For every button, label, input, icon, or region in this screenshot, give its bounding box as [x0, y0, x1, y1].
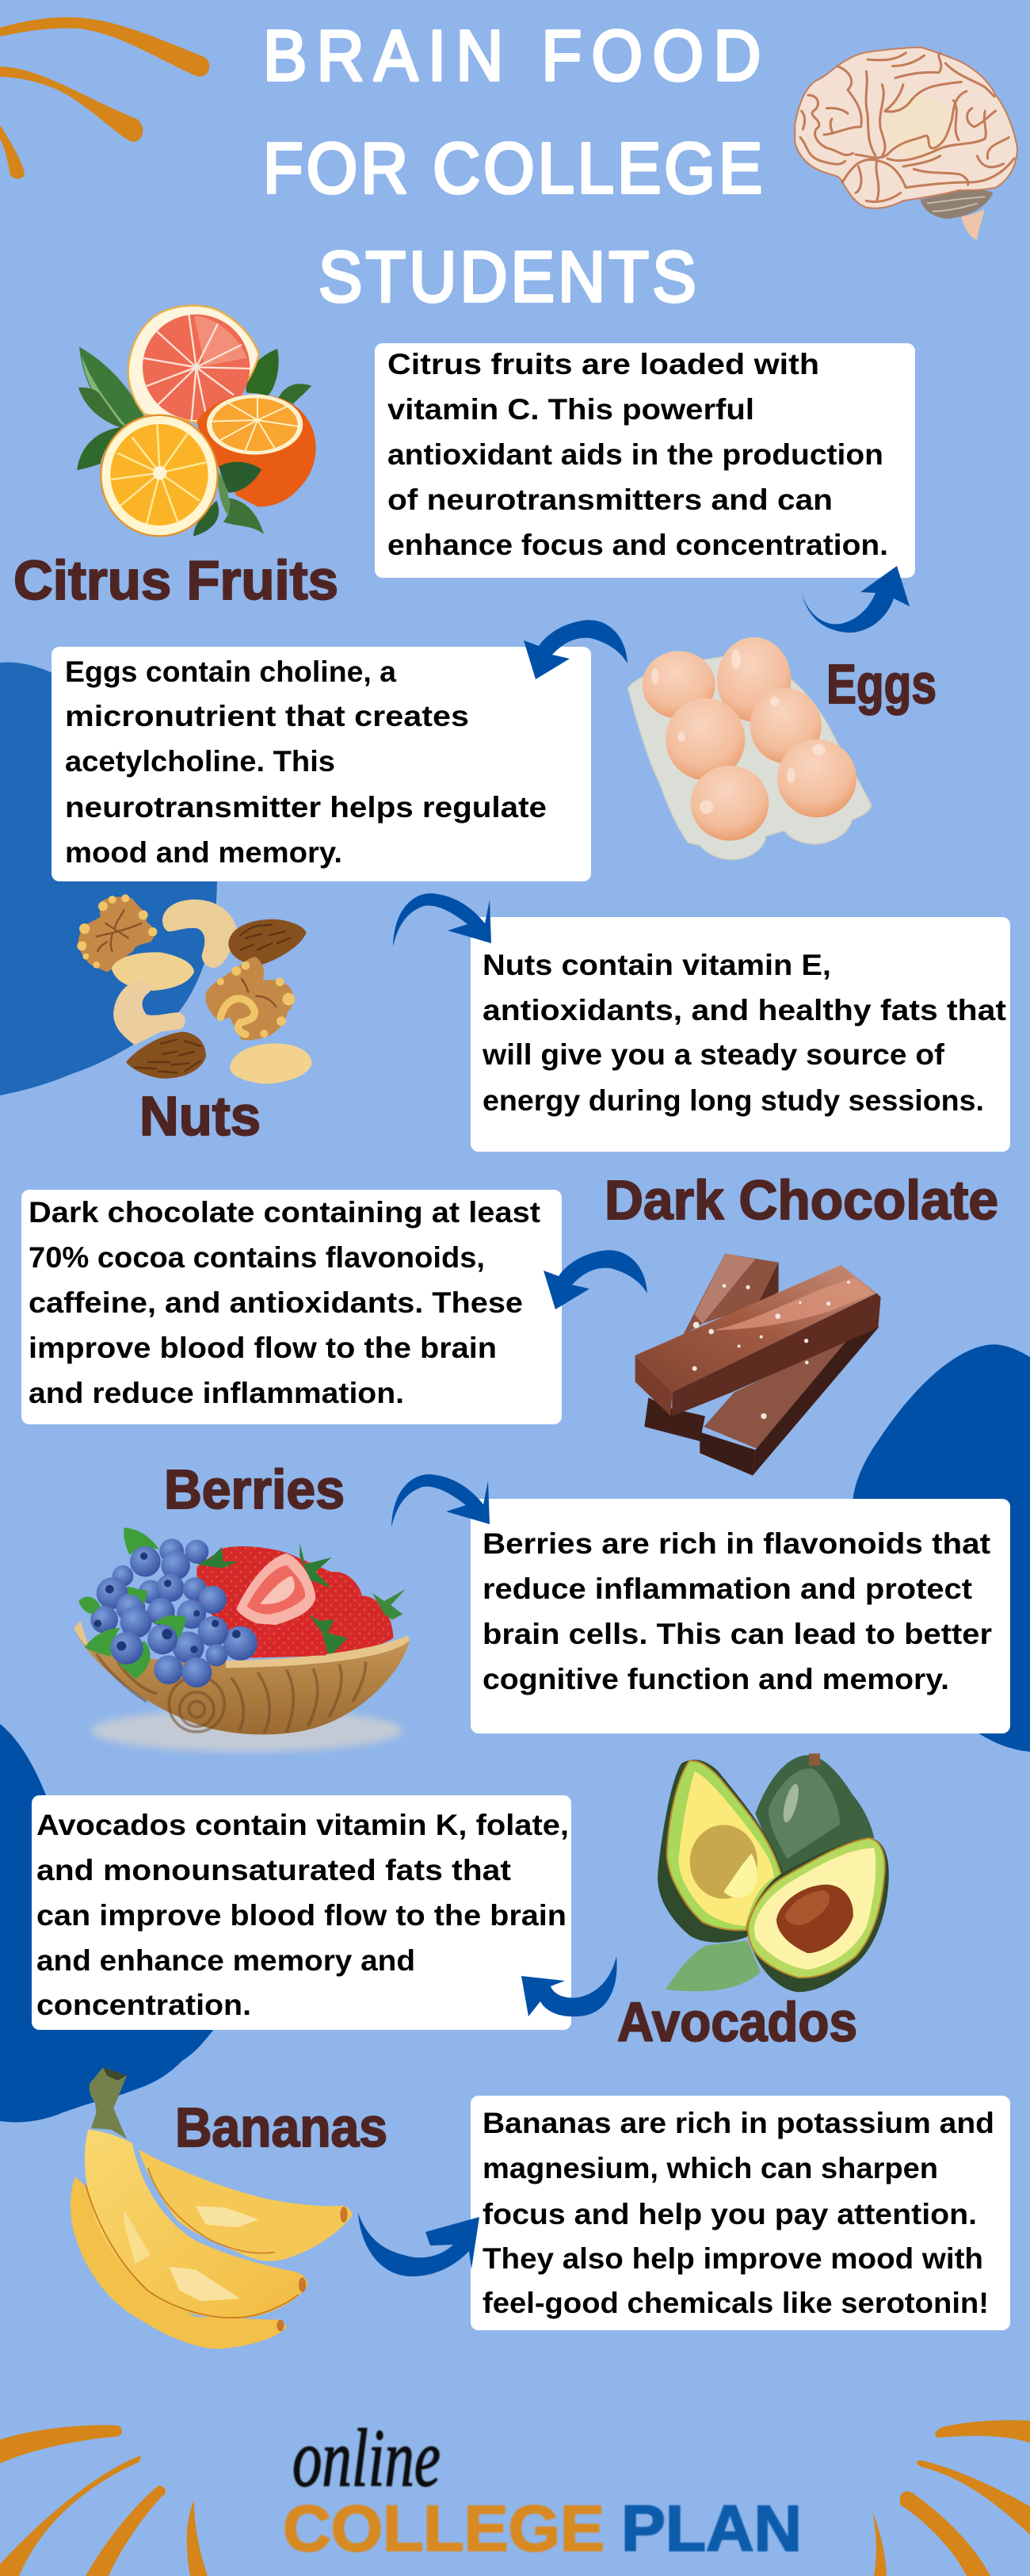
heading: Nuts: Nuts: [139, 1085, 261, 1147]
panel: berries text card: reduce inflammation and protect: [483, 1573, 972, 1605]
panel: dark chocolate text card: Dark chocolate containing at least: [29, 1196, 540, 1229]
panel: bananas text card: Bananas are rich in potassium and: [483, 2107, 994, 2139]
panel: eggs text card: acetylcholine. This: [65, 745, 335, 778]
arrow: dark chocolate: [544, 1250, 647, 1309]
logo: Online College Plan: COLLEGE: [283, 2493, 605, 2565]
heading: Citrus Fruits: Citrus Fruits: [13, 549, 338, 611]
logo: Online College Plan: PLAN: [621, 2493, 802, 2565]
panel: avocados text card: can improve blood flow to the brain: [36, 1899, 566, 1932]
icon: berries bowl: [74, 1527, 410, 1752]
background blob: left lower: [0, 1724, 217, 2123]
panel: bananas text card: focus and help you pay attention.: [483, 2198, 977, 2230]
panel: berries text card: [471, 1499, 1010, 1733]
panel: eggs text card: [52, 647, 591, 881]
heading: Dark Chocolate: Dark Chocolate: [605, 1169, 998, 1231]
arrow: avocados: [521, 1956, 617, 2016]
icon: dark chocolate bars: [635, 1254, 881, 1476]
panel: bananas text card: They also help improve mood with: [483, 2242, 983, 2275]
title: [263, 17, 762, 317]
arrow: bananas: [358, 2213, 479, 2276]
heading: Avocados: Avocados: [617, 1991, 857, 2053]
panel: nuts text card: [471, 917, 1010, 1152]
background blob: left upper: [0, 663, 217, 1095]
panel: eggs text card: Eggs contain choline, a: [65, 655, 396, 688]
panel: citrus text card: enhance focus and concentration.: [387, 529, 888, 561]
logo: Online College Plan: [283, 2413, 802, 2565]
arrow: eggs to eggs card: [524, 620, 628, 679]
arrow: berries: [391, 1474, 490, 1527]
panel: nuts text card: Nuts contain vitamin E,: [483, 949, 831, 981]
panel: citrus text card: antioxidant aids in the production: [387, 438, 883, 471]
panel: bananas text card: magnesium, which can sharpen: [483, 2152, 938, 2184]
title: BRAIN FOOD: [263, 17, 761, 96]
icon: eggs in tray: [628, 637, 872, 860]
panel: berries text card: brain cells. This can lead to better: [483, 1618, 992, 1650]
panel: bananas text card: feel-good chemicals like serotonin!: [483, 2287, 989, 2319]
icon: nuts: [77, 894, 311, 1084]
logo: Online College Plan: online: [292, 2413, 441, 2504]
panel: nuts text card: energy during long study sessions.: [483, 1084, 984, 1117]
panel: dark chocolate text card: [21, 1190, 562, 1424]
panel: citrus text card: vitamin C. This powerful: [387, 393, 754, 426]
panel: avocados text card: [32, 1795, 571, 2030]
decoration: bottom-left orange strokes: [0, 2425, 208, 2576]
heading: Eggs: Eggs: [826, 653, 937, 715]
panel: nuts text card: antioxidants, and healthy fats that: [483, 994, 1006, 1026]
arrow: citrus to eggs: [802, 566, 910, 633]
icon: avocados: [658, 1753, 889, 1992]
heading: Bananas: Bananas: [175, 2096, 387, 2158]
title: STUDENTS: [319, 238, 696, 317]
panel: dark chocolate text card: improve blood flow to the brain: [29, 1332, 497, 1364]
panel: avocados text card: concentration.: [36, 1989, 251, 2021]
arrow: nuts: [393, 893, 491, 946]
panel: nuts text card: will give you a steady source of: [482, 1038, 945, 1071]
icon: brain: [795, 48, 1017, 240]
panel: dark chocolate text card: 70% cocoa contains flavonoids,: [29, 1241, 485, 1274]
panel: berries text card: Berries are rich in flavonoids that: [483, 1527, 990, 1560]
icon: bananas: [71, 2067, 353, 2349]
panel: citrus text card: of neurotransmitters and can: [387, 483, 833, 516]
panel: bananas text card: [471, 2096, 1010, 2330]
panel: citrus text card: [375, 343, 915, 578]
panel: avocados text card: Avocados contain vitamin K, folate,: [36, 1809, 569, 1841]
heading: Berries: Berries: [164, 1458, 345, 1520]
background blob: right middle: [853, 1344, 1030, 1752]
title: FOR COLLEGE: [263, 129, 762, 208]
decoration: bottom-right orange strokes: [872, 2420, 1030, 2576]
panel: eggs text card: micronutrient that creates: [65, 700, 469, 732]
panel: berries text card: cognitive function and memory.: [483, 1663, 949, 1695]
icon: citrus fruits: [77, 305, 316, 537]
panel: dark chocolate text card: and reduce inflammation.: [29, 1377, 404, 1409]
panel: citrus text card: Citrus fruits are loaded with: [387, 348, 819, 380]
panel: eggs text card: neurotransmitter helps regulate: [65, 791, 547, 824]
decoration: top-left orange strokes: [0, 17, 209, 178]
panel: avocados text card: and enhance memory and: [36, 1944, 415, 1977]
panel: dark chocolate text card: caffeine, and antioxidants. These: [29, 1286, 523, 1319]
panel: avocados text card: and monounsaturated fats that: [36, 1854, 511, 1886]
panel: eggs text card: mood and memory.: [65, 836, 342, 869]
